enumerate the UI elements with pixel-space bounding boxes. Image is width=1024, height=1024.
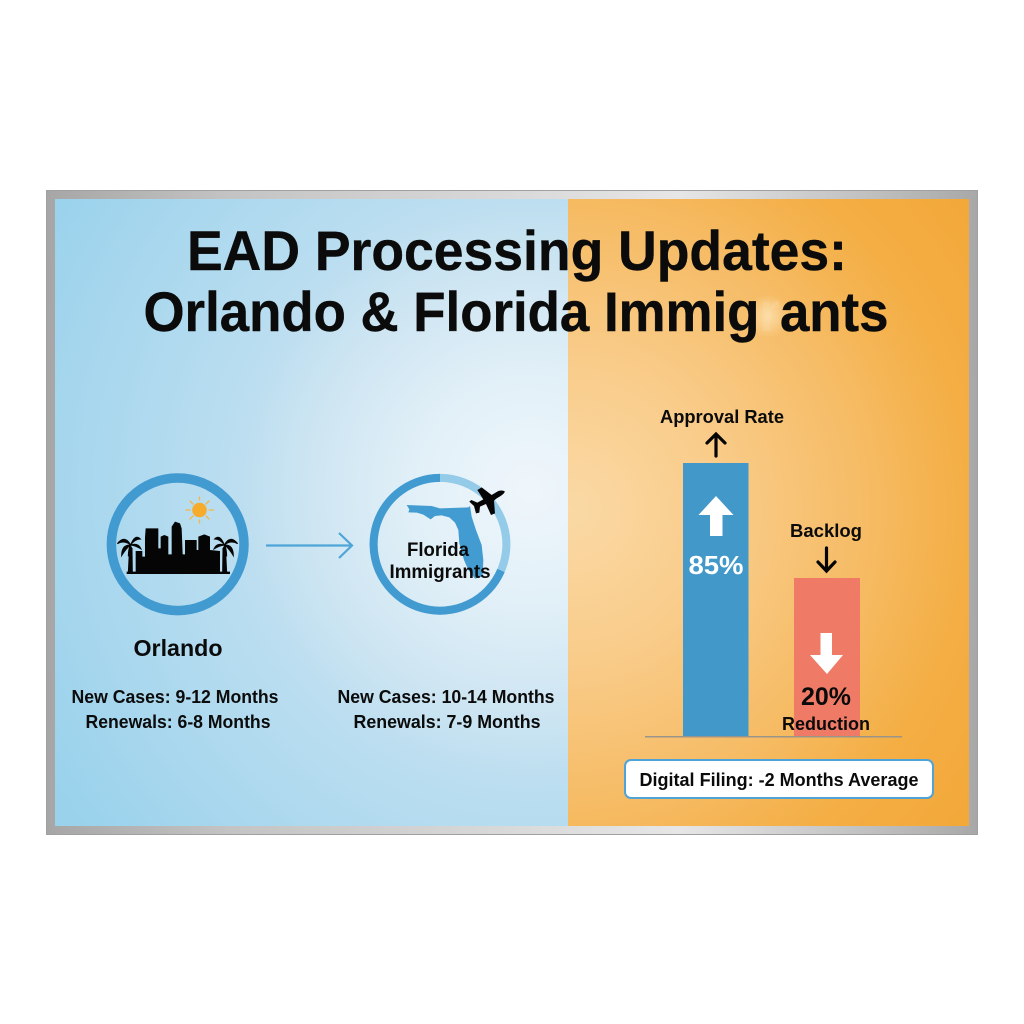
title: EAD Processing Updates: [187,219,847,282]
icon: airplane [469,487,505,515]
callout: digital filing: Digital Filing: -2 Months Average [640,770,918,790]
bar: approval rate [683,463,748,737]
icon: white up arrow [698,496,734,536]
arrow: black down [818,548,835,571]
text: Florida processing times [338,687,554,732]
bar: backlog [782,578,870,737]
arrow: Orlando to Florida [266,533,352,558]
bar: approval rate: 85% [688,550,744,580]
bar: backlog: 20% [801,683,851,711]
label: Backlog: Backlog [790,521,862,541]
text: Florida processing times: New Cases: 10-14 Months [338,687,554,707]
label: Orlando: Orlando [134,635,222,661]
icon: white down arrow [810,633,843,674]
icon: Florida map [407,505,483,579]
callout: digital filing [625,760,933,798]
text: Orlando processing times: New Cases: 9-12 Months [72,687,278,707]
title [144,219,888,343]
bar: backlog: Reduction [782,714,870,734]
text: Orlando processing times: Renewals: 6-8 Months [86,712,270,732]
icon: city skyline with palms [117,522,238,574]
icon: sun [186,497,214,523]
icon: Florida Immigrants badge [374,478,506,611]
arrow: black up [707,434,725,456]
label: Approval Rate: Approval Rate [660,407,784,427]
label: Florida Immigrants: Immigrants [390,562,490,583]
axis line [645,736,902,738]
label: Florida Immigrants: Florida [407,540,469,561]
panel: Orlando and Florida timelines background [55,199,568,826]
icon: Orlando skyline badge [111,478,244,611]
bar chart [645,407,902,738]
text: Orlando processing times [72,687,278,732]
panel: statistics background [568,199,969,826]
label: Florida Immigrants [390,540,490,583]
panel: metal frame [46,190,978,834]
title: Orlando & Florida Immigrants [144,280,888,343]
text: Florida processing times: Renewals: 7-9 Months [354,712,540,732]
glare on title [746,294,790,338]
